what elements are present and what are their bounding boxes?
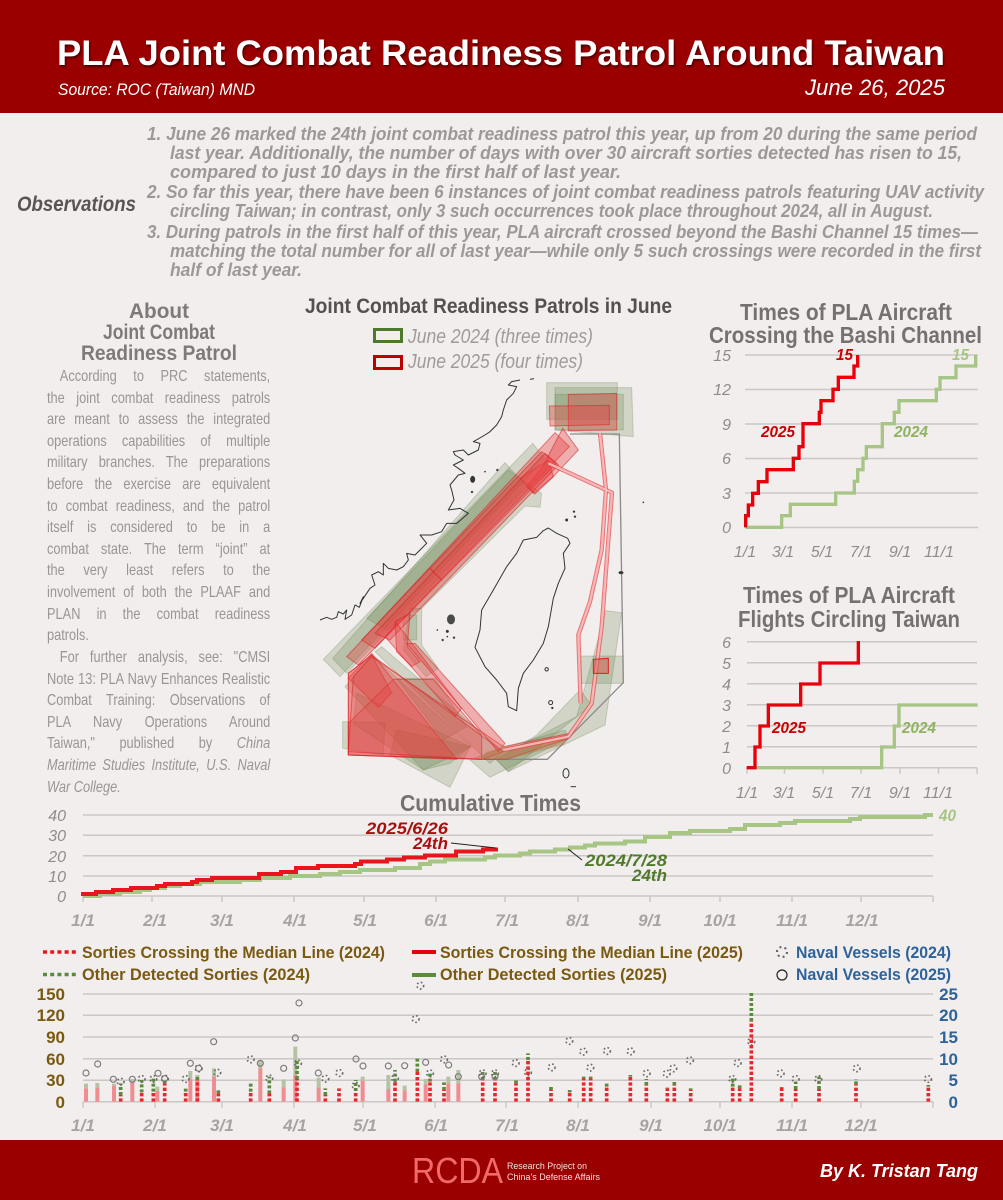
chart: daily sorties and naval vessels: 2/1: [142, 1116, 167, 1135]
callout 2025: 24th: [412, 834, 448, 853]
observations list: 1. June 26 marked the 24th joint combat readiness patrol this year, up from 20 during the same period: [147, 124, 978, 144]
chart: flights circling Taiwan: 0: [722, 761, 731, 778]
chart: Bashi Channel crossings: 5/1: [811, 544, 833, 561]
chart: Bashi Channel crossings: 12: [713, 382, 731, 399]
chart: cumulative times: 20: [47, 849, 66, 866]
about body text: War College.: [47, 779, 121, 796]
chart: Bashi Channel crossings: 11/1: [924, 544, 954, 561]
chart: Bashi Channel crossings: [713, 347, 978, 561]
about body text: Taiwan," published by China: [47, 735, 270, 752]
2024 patrol zones: [323, 383, 633, 787]
about body text: [47, 368, 270, 796]
chart: flights circling Taiwan: 2024: [901, 720, 936, 737]
chart: daily sorties and naval vessels: 12/1: [844, 1116, 878, 1135]
about body text: Maritime Studies Institute, U.S. Naval: [47, 757, 270, 774]
observations list: last year. Additionally, the number of days with over 30 aircraft sorties detected has risen to 15,: [170, 143, 962, 163]
chart: Bashi Channel crossings: 15: [952, 347, 970, 364]
date: June 26, 2025: [804, 75, 946, 100]
chart: Bashi Channel crossings: 1/1: [734, 544, 756, 561]
chart: daily sorties and naval vessels: 0: [56, 1093, 65, 1112]
2024 bars: other sorties, second half: [516, 992, 928, 1092]
sorties legend: [43, 943, 951, 984]
2024 line: [757, 705, 978, 768]
brown band along southern route: [480, 735, 568, 759]
chart: daily sorties and naval vessels: 25: [939, 985, 958, 1004]
about body text: Combat Training: Observations of: [47, 692, 270, 709]
RCDA logo text: RCDA: [412, 1150, 503, 1191]
observations list: compared to just 10 days in the first half of last year.: [170, 162, 621, 182]
chart: flights circling Taiwan: 5/1: [812, 785, 834, 802]
chart: daily sorties and naval vessels: 4/1: [282, 1116, 307, 1135]
chart: daily sorties and naval vessels: 9/1: [639, 1116, 663, 1135]
map heading: Joint Combat Readiness Patrols in June: [305, 295, 672, 318]
2024 bars: median line sorties: [121, 1072, 495, 1102]
about body text: According to PRC statements,: [60, 368, 270, 385]
chart: Bashi Channel crossings: 3: [722, 486, 731, 503]
map of patrol zones around Taiwan: [320, 379, 644, 787]
author: By K. Tristan Tang: [820, 1161, 978, 1181]
observations list: circling Taiwan; in contrast, only 3 such occurrences took place throughout 2024, all in August.: [170, 201, 933, 221]
chart: cumulative times: 6/1: [424, 911, 448, 930]
chart: flights circling Taiwan: 5: [722, 656, 731, 673]
map legend: June 2024 (three times): [407, 326, 593, 348]
2025 bars: other sorties: [86, 1047, 458, 1091]
2025 line: [747, 641, 858, 768]
chart: Bashi Channel crossings: 15: [836, 347, 854, 364]
source line: Source: ROC (Taiwan) MND: [58, 80, 255, 99]
chart: cumulative times: 1/1: [71, 911, 95, 930]
chart: Bashi Channel crossings: 7/1: [850, 544, 872, 561]
chart: daily sorties and naval vessels: 10: [939, 1050, 958, 1069]
chart: daily sorties and naval vessels: 15: [939, 1028, 958, 1047]
2024 line: [746, 355, 976, 527]
chart: flights circling Taiwan: 11/1: [923, 785, 953, 802]
chart: Bashi Channel crossings: 0: [722, 520, 731, 537]
about body text: operations capabilities of multiple: [47, 433, 270, 450]
2025 patrol zones: [347, 393, 617, 759]
chart title: Bashi Channel: Times of PLA Aircraft: [740, 299, 952, 325]
2024 naval vessels: [117, 982, 498, 1089]
chart: cumulative times: 10: [48, 869, 66, 886]
chart: daily sorties and naval vessels: 90: [46, 1028, 65, 1047]
chart: flights circling Taiwan: 3/1: [773, 785, 795, 802]
about heading: [81, 300, 237, 365]
map legend: June 2025 (four times): [407, 351, 583, 373]
chart: flights circling Taiwan: 1/1: [736, 785, 758, 802]
observations list: half of last year.: [170, 260, 302, 280]
header band: [0, 0, 1003, 113]
about body text: patrols.: [47, 627, 89, 644]
chart: flights circling Taiwan: 6: [722, 635, 731, 652]
chart: daily sorties and naval vessels: 60: [46, 1050, 65, 1069]
chart: cumulative times: 12/1: [845, 911, 879, 930]
about body text: PLAN in the combat readiness: [47, 606, 270, 623]
chart: cumulative times: 11/1: [776, 911, 808, 930]
observations list: [146, 124, 985, 280]
chart title: circling Taiwan: [738, 582, 960, 632]
chart: daily sorties and naval vessels: 30: [46, 1071, 65, 1090]
2025 line: [746, 355, 858, 527]
chart: cumulative times: 8/1: [566, 911, 590, 930]
chart: daily sorties and naval vessels: [37, 982, 958, 1135]
chart: daily sorties and naval vessels: 5/1: [353, 1116, 377, 1135]
chart: cumulative times: 0: [57, 889, 66, 906]
chart: flights circling Taiwan: 7/1: [850, 785, 872, 802]
map legend: [374, 326, 593, 373]
chart: cumulative times: 4/1: [282, 911, 307, 930]
about body text: involvement of both the PLAAF and: [47, 584, 270, 601]
chart: daily sorties and naval vessels: 5: [949, 1071, 958, 1090]
chart: Bashi Channel crossings: 2025: [760, 424, 796, 441]
chart: flights circling Taiwan: 4: [722, 677, 731, 694]
about heading: Joint Combat: [103, 321, 215, 344]
2024 cumulative line: [83, 815, 933, 896]
chart: cumulative times: 7/1: [495, 911, 519, 930]
chart: daily sorties and naval vessels: 120: [37, 1006, 65, 1025]
chart: flights circling Taiwan: 3: [722, 698, 731, 715]
sorties legend: Other Detected Sorties (2025): [440, 965, 667, 984]
sorties legend: Sorties Crossing the Median Line (2024): [82, 943, 385, 962]
stated patrol outline: [483, 434, 623, 759]
2024 naval vessels, second half: [512, 1038, 931, 1082]
chart: Bashi Channel crossings: 2024: [893, 424, 928, 441]
chart: daily sorties and naval vessels: 8/1: [566, 1116, 590, 1135]
2025 bars: median line sorties: [86, 1068, 458, 1102]
about body text: before the exercise are equivalent: [47, 476, 270, 493]
project name: China's Defense Affairs: [507, 1172, 600, 1183]
chart: cumulative times: 5/1: [353, 911, 377, 930]
chart: Bashi Channel crossings: 9: [722, 417, 731, 434]
sorties legend: Sorties Crossing the Median Line (2025): [440, 943, 743, 962]
project name: Research Project on: [507, 1161, 587, 1172]
observations list: 2. So far this year, there have been 6 instances of joint combat readiness patrols featuring UAV activity: [146, 182, 985, 202]
end value: 40: [938, 806, 956, 825]
observations label: Observations: [17, 193, 136, 216]
about body text: itself is considered to be in a: [47, 519, 270, 536]
2025 flight corridors: [503, 433, 612, 750]
callout 2024: 2024/7/28: [584, 851, 668, 870]
callout 2025: 2025/6/26: [365, 819, 449, 838]
chart: cumulative times: [47, 806, 956, 930]
about body text: to combat readiness, and the patrol: [47, 498, 270, 515]
China coastline: [320, 380, 520, 620]
chart: flights circling Taiwan: 2: [721, 719, 731, 736]
chart: cumulative times: 10/1: [703, 911, 737, 930]
chart: cumulative times: 3/1: [210, 911, 234, 930]
chart: Bashi Channel crossings: 6: [722, 451, 731, 468]
2025 cumulative line: [83, 848, 496, 896]
chart title: circling Taiwan: Times of PLA Aircraft: [743, 582, 955, 608]
footer band: [0, 1140, 1003, 1200]
about heading: About: [129, 300, 189, 323]
about body text: military branches. The preparations: [47, 454, 270, 471]
chart title: circling Taiwan: Flights Circling Taiwan: [738, 606, 960, 632]
2024 bars: other sorties: [121, 1057, 495, 1095]
chart: cumulative times: 2/1: [142, 911, 167, 930]
2025 naval vessels: [83, 1000, 498, 1082]
outlying islands: [437, 379, 644, 787]
chart: Bashi Channel crossings: 15: [713, 348, 731, 365]
chart: daily sorties and naval vessels: 10/1: [703, 1116, 737, 1135]
chart title: Bashi Channel: [709, 299, 982, 348]
2024 bars: median line sorties, second half: [516, 1021, 928, 1102]
chart: daily sorties and naval vessels: 6/1: [424, 1116, 448, 1135]
chart: flights circling Taiwan: 2025: [771, 720, 807, 737]
chart: cumulative times: 30: [48, 828, 66, 845]
project name: [507, 1161, 600, 1183]
chart: flights circling Taiwan: 9/1: [889, 785, 911, 802]
sorties legend: Other Detected Sorties (2024): [82, 965, 310, 984]
callout 2025: [365, 819, 496, 853]
Taiwan outline: [475, 528, 570, 711]
chart: daily sorties and naval vessels: 11/1: [776, 1116, 808, 1135]
about body text: combat state. The term “joint” at: [47, 541, 270, 558]
chart: daily sorties and naval vessels: 1/1: [71, 1116, 95, 1135]
east zone marker: [593, 658, 608, 673]
about body text: the very least refers to the: [47, 562, 270, 579]
title: PLA Joint Combat Readiness Patrol Around Taiwan: [57, 34, 945, 73]
about body text: PLA Navy Operations Around: [47, 714, 270, 731]
sorties legend: Naval Vessels (2025): [796, 965, 951, 984]
chart: cumulative times: 9/1: [638, 911, 662, 930]
chart: flights circling Taiwan: 1: [722, 740, 731, 757]
about body text: the joint combat readiness patrols: [47, 390, 270, 407]
callout 2024: 24th: [631, 866, 667, 885]
chart: daily sorties and naval vessels: 20: [939, 1006, 958, 1025]
chart: cumulative times: 40: [48, 808, 66, 825]
about body text: are meant to assess the integrated: [47, 411, 270, 428]
about body text: For further analysis, see: "CMSI: [60, 649, 270, 666]
sorties legend: Naval Vessels (2024): [796, 943, 951, 962]
chart: daily sorties and naval vessels: 7/1: [495, 1116, 519, 1135]
chart: daily sorties and naval vessels: 0: [949, 1093, 958, 1112]
observations list: matching the total number for all of last year—while only 5 such crossings were recorded in the first: [170, 241, 982, 261]
cumulative title: Cumulative Times: [400, 790, 581, 816]
callout 2024: [568, 849, 668, 885]
chart: Bashi Channel crossings: 3/1: [772, 544, 794, 561]
about heading: Readiness Patrol: [81, 342, 237, 365]
chart: daily sorties and naval vessels: 150: [37, 985, 65, 1004]
chart: Bashi Channel crossings: 9/1: [889, 544, 911, 561]
about body text: Note 13: PLA Navy Enhances Realistic: [47, 671, 270, 688]
chart: flights circling Taiwan: [721, 635, 978, 802]
chart: daily sorties and naval vessels: 3/1: [210, 1116, 234, 1135]
